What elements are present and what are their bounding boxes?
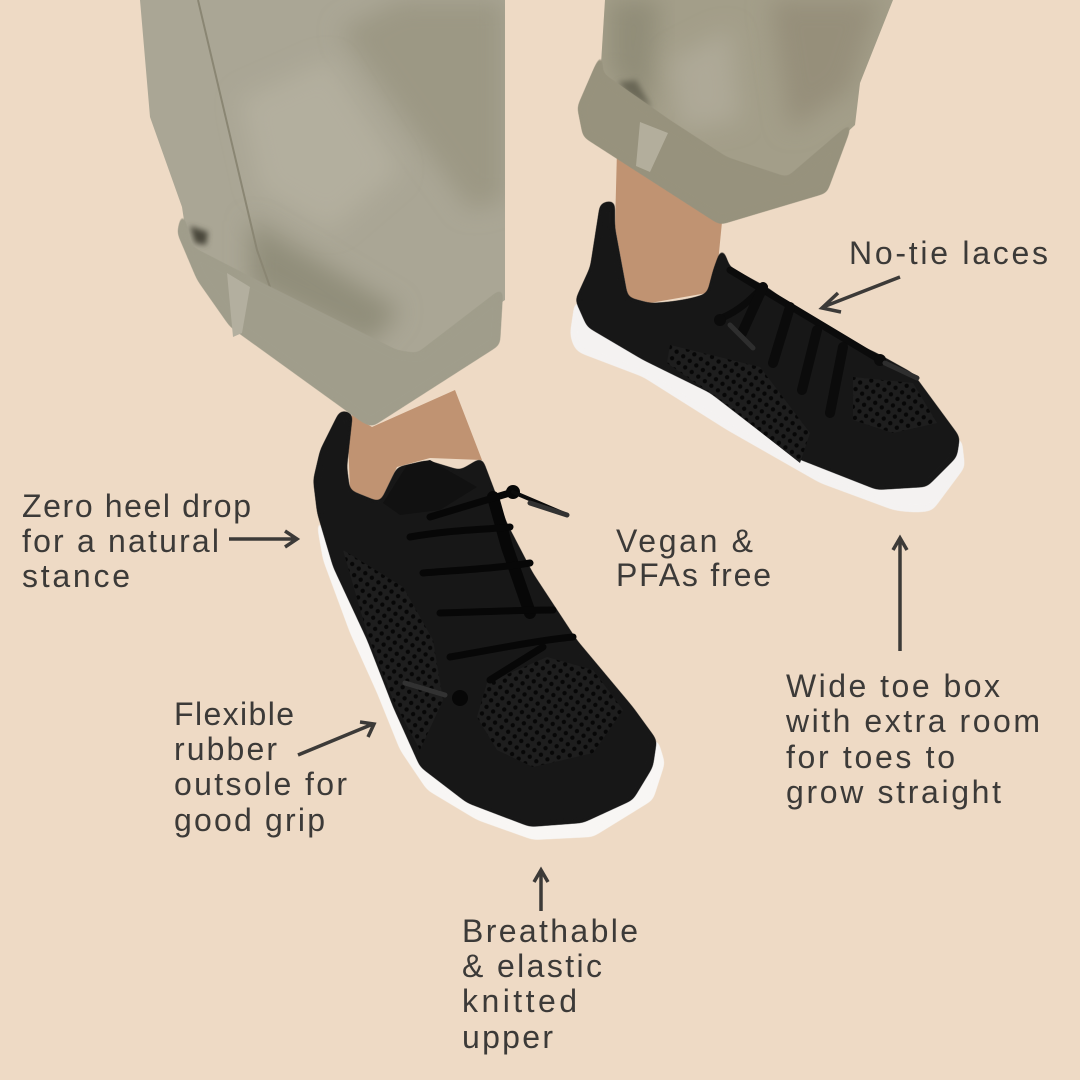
arrow: wide toe box: [893, 538, 907, 651]
label: zero heel drop: [22, 488, 297, 594]
knit panels: right shoe: [667, 345, 937, 463]
laces: left shoe: [405, 485, 573, 706]
sole: left shoe: [315, 515, 665, 840]
shoe: right foot: [570, 150, 965, 512]
label: flexible outsole: outsole for: [174, 766, 347, 802]
shoe: left foot: [313, 390, 665, 840]
label: breathable upper: knitted: [462, 983, 577, 1019]
upper: left shoe: [313, 410, 657, 827]
label: zero heel drop: Zero heel drop: [22, 488, 251, 524]
label: wide toe box: for toes to: [786, 739, 955, 775]
label: breathable upper: & elastic: [462, 948, 602, 984]
cuff stitching: left leg: [227, 273, 250, 337]
sole: right shoe: [570, 300, 965, 512]
arrow: flexible outsole: [298, 722, 374, 755]
ankle: left leg: [348, 390, 482, 502]
label: flexible outsole: good grip: [174, 802, 325, 838]
label: flexible outsole: rubber: [174, 731, 277, 767]
label: breathable upper: [462, 870, 638, 1055]
label: vegan: Vegan &: [616, 523, 753, 559]
cuff stitching: right leg: [636, 122, 668, 172]
arrow: zero heel drop: [229, 531, 297, 547]
label: vegan: PFAs free: [616, 557, 771, 593]
arrow: breathable upper: [534, 870, 548, 911]
seam: left leg: [198, 0, 270, 287]
label: flexible outsole: Flexible: [174, 696, 294, 732]
label: breathable upper: upper: [462, 1019, 553, 1055]
label: flexible outsole: [174, 696, 374, 838]
arrow: no-tie laces: [822, 277, 900, 312]
label: zero heel drop: stance: [22, 558, 130, 594]
ankle: right leg: [615, 150, 722, 303]
trousers: left leg: [140, 0, 505, 427]
label: zero heel drop: for a natural: [22, 523, 219, 559]
tongue shade: [383, 460, 477, 515]
label: no-tie laces: [822, 235, 1048, 312]
label: vegan: [616, 523, 771, 593]
label: breathable upper: Breathable: [462, 913, 638, 949]
knit panels: left shoe: [343, 550, 623, 767]
trousers: right leg: [577, 0, 893, 225]
label: wide toe box: grow straight: [786, 774, 1001, 810]
laces: right shoe: [714, 270, 917, 413]
label: wide toe box: Wide toe box: [786, 668, 1000, 704]
cuff: left leg: [177, 207, 505, 427]
upper: right shoe: [575, 200, 960, 490]
cuff: right leg: [577, 47, 860, 225]
label: wide toe box: [785, 538, 1040, 810]
label: wide toe box: with extra room: [785, 703, 1040, 739]
label: no-tie laces: No-tie laces: [849, 235, 1048, 271]
